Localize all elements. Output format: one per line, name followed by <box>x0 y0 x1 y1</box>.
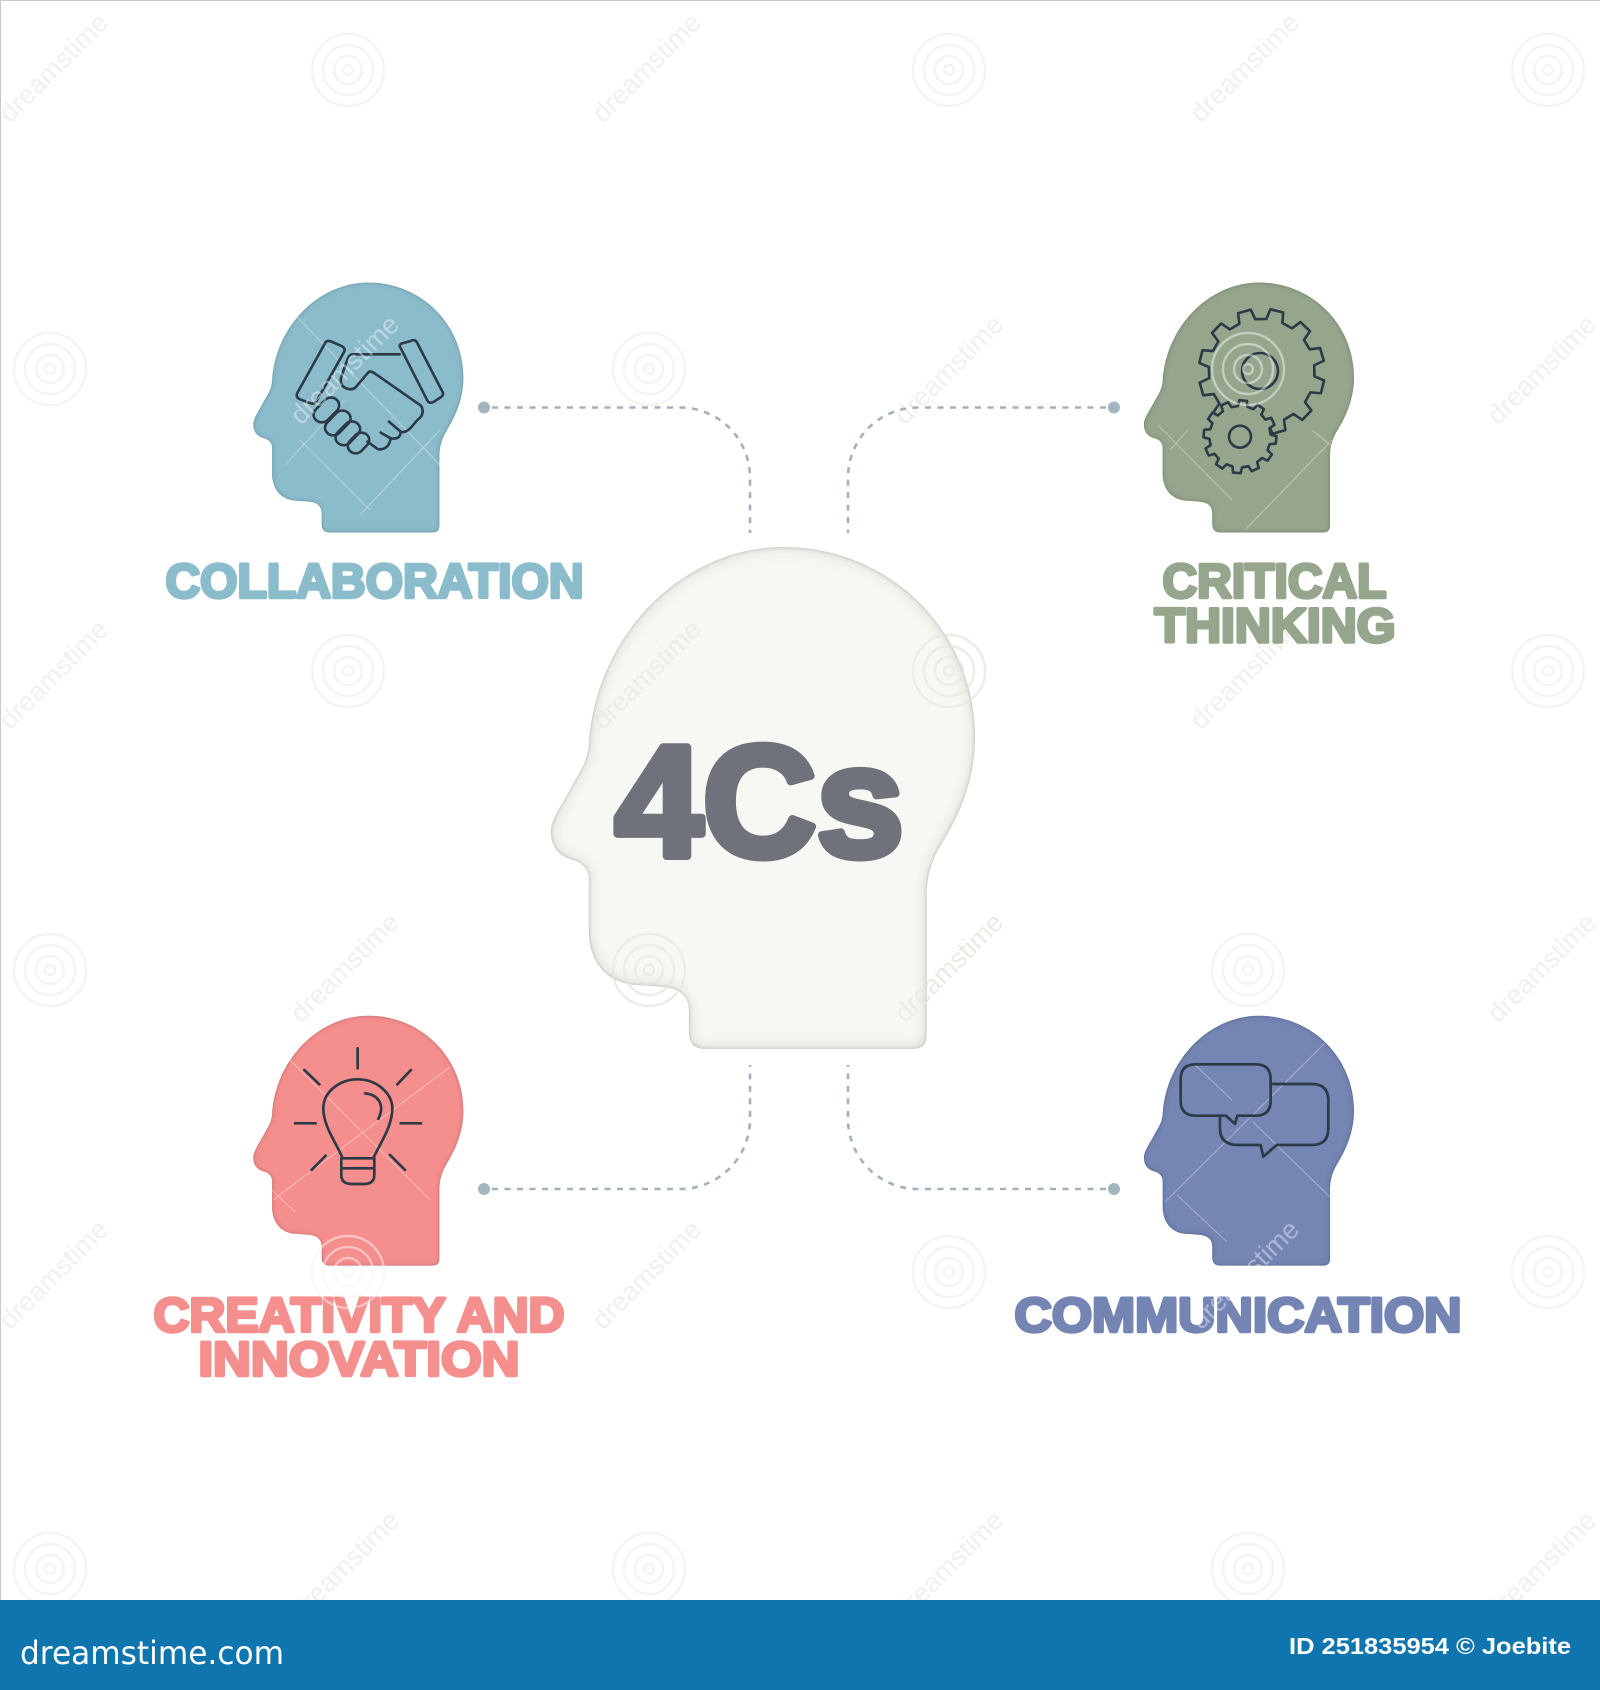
panel: collaboration <box>166 283 584 609</box>
watermark layer: dreamstime <box>1184 614 1305 735</box>
label: critical thinking: CRITICAL <box>1162 555 1386 609</box>
watermark layer: dreamstime <box>1481 907 1600 1028</box>
connector: creativity to center <box>478 1065 750 1195</box>
watermark layer: dreamstime <box>1481 1505 1600 1626</box>
icon: gears <box>1186 296 1338 476</box>
central head: 4Cs <box>551 547 975 1049</box>
watermark layer: dreamstime <box>1481 309 1600 430</box>
panel: communication <box>1014 1016 1462 1342</box>
central heading: 4Cs <box>615 714 904 890</box>
watermark layer: dreamstime <box>284 907 405 1028</box>
watermark layer: dreamstime <box>284 1505 405 1626</box>
watermark overlay on heads: dreamstime <box>1184 1214 1305 1335</box>
panel: creativity and innovation: INNOVATION <box>198 1333 520 1387</box>
watermark overlay on heads: dreamstime <box>284 309 405 430</box>
panel: creativity and innovation <box>154 1016 564 1387</box>
connector: communication to center <box>848 1065 1120 1195</box>
watermark overlay on heads: dreamstime <box>888 907 1009 1028</box>
watermark overlay on heads: dreamstime <box>586 614 707 735</box>
watermark layer: dreamstime <box>888 907 1009 1028</box>
label: collaboration: COLLABORATION <box>166 555 584 609</box>
watermark layer: dreamstime <box>586 1214 707 1335</box>
watermark layer: dreamstime <box>888 309 1009 430</box>
watermark layer: dreamstime <box>888 1505 1009 1626</box>
head: collaboration <box>253 283 463 532</box>
connector: critical thinking to center <box>848 402 1120 533</box>
head: communication <box>1144 1016 1354 1266</box>
icon: light bulb <box>295 1048 421 1184</box>
icon: handshake <box>297 340 443 456</box>
watermark layer: dreamstime <box>586 7 707 128</box>
footer credit: ID 251835954 © Joebite <box>1289 1633 1571 1659</box>
label: creativity and innovation: CREATIVITY AND <box>154 1288 564 1342</box>
panel: critical thinking: THINKING <box>1154 599 1396 653</box>
watermark overlay on heads <box>284 309 1305 1335</box>
icon: speech bubbles <box>1181 1064 1328 1157</box>
head: critical thinking <box>1144 283 1354 532</box>
panel: critical thinking <box>1144 283 1396 653</box>
label: communication: COMMUNICATION <box>1014 1288 1462 1342</box>
head: creativity <box>253 1016 463 1266</box>
footer logo: dreamstime.com <box>20 1634 284 1672</box>
watermark layer: dreamstime <box>1184 7 1305 128</box>
footer bar <box>0 1600 1600 1690</box>
connector: collaboration to center <box>478 402 750 533</box>
